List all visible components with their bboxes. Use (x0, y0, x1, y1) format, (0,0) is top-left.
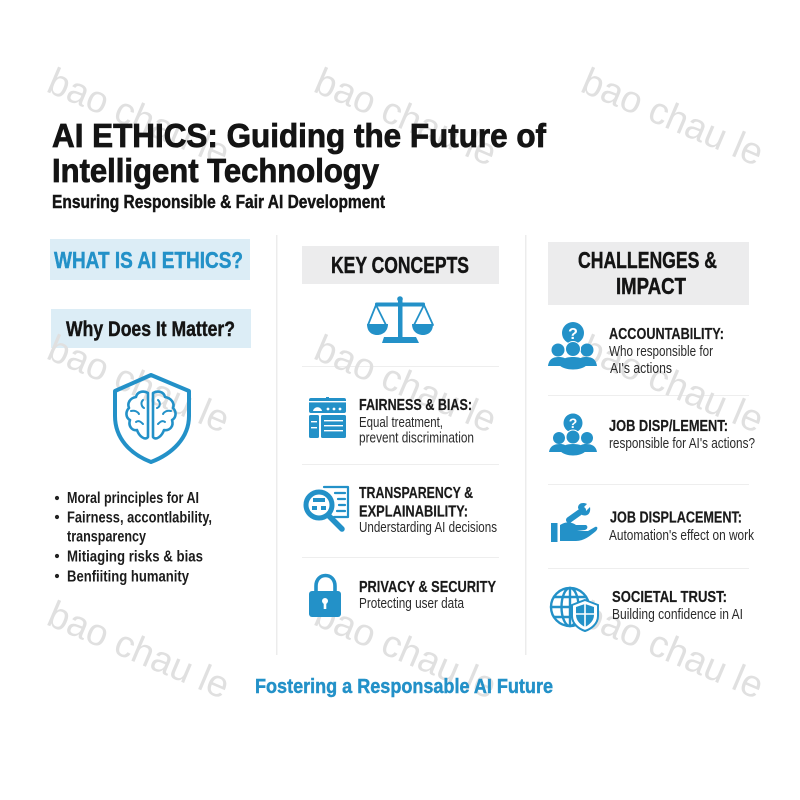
heading: why does it matter: Why Does It Matter? (66, 318, 235, 341)
panel: what is AI ethics (54, 247, 243, 586)
watermark pattern: bao chau le (308, 594, 503, 708)
item: transparency and explainability: Understarding AI decisions (359, 520, 497, 536)
icon: hand holding wrench (551, 503, 597, 542)
item: fairness and bias (309, 397, 474, 446)
icon: people with question mark: ? (568, 326, 578, 343)
watermark pattern: bao chau le (575, 328, 770, 442)
footer tagline: Fostering a Responsable AI Future (255, 676, 553, 698)
item: transparency and explainability: EXPLAINABILITY: (359, 504, 468, 520)
watermark pattern: bao chau le (41, 328, 236, 442)
watermark pattern: bao chau le (575, 594, 770, 708)
title (52, 118, 547, 190)
title: AI ETHICS: Guiding the Future of (52, 118, 547, 155)
heading: challenges and impact (578, 247, 717, 299)
watermark pattern: bao chau le (41, 594, 236, 708)
item: societal trust: SOCIETAL TRUST: (612, 589, 727, 606)
heading: challenges and impact: CHALLENGES & (578, 247, 717, 273)
icon: people with question mark (548, 322, 597, 370)
item: societal trust: Building confidence in AI (612, 607, 743, 623)
item: privacy and security: Protecting user data (359, 596, 465, 612)
title: Intelligent Technology (52, 153, 379, 190)
panel: key concepts (306, 252, 497, 617)
icon: globe with shield (551, 588, 598, 631)
item: job displacement question: JOB DISP/LEMENT: (609, 418, 728, 435)
heading box: challenges and impact (548, 242, 749, 305)
icon: padlock (309, 576, 341, 617)
subtitle: Ensuring Responsible & Fair AI Development (52, 192, 385, 212)
icon: people with question mark (549, 414, 597, 456)
watermark pattern (41, 61, 770, 708)
item: accountability (548, 322, 724, 377)
icon: people with question mark: ? (569, 415, 577, 431)
heading: what is AI ethics: WHAT IS AI ETHICS? (54, 247, 243, 273)
item: accountability: Who responsible for (609, 344, 713, 360)
item: transparency and explainability: TRANSPARENCY & (359, 485, 473, 502)
icon: shield with brain (115, 375, 189, 462)
item: societal trust (551, 588, 743, 631)
icon: balance scales (367, 296, 433, 343)
heading box: what is AI ethics (50, 239, 250, 280)
icon: magnifier over document (306, 487, 348, 529)
heading: challenges and impact: IMPACT (616, 273, 686, 299)
item: job displacement: Automation's effect on work (609, 528, 755, 544)
bullet list: moral principles (55, 490, 212, 586)
watermark pattern: bao chau le (575, 61, 770, 175)
item: fairness and bias: Equal treatment, (359, 415, 443, 431)
item: fairness and bias: FAIRNESS & BIAS: (359, 397, 472, 414)
item: accountability: AI's actions (610, 361, 672, 377)
bullet list: moral principles: Fairness, accontlability, (67, 510, 212, 526)
watermark pattern: bao chau le (308, 61, 503, 175)
heading box: why does it matter (51, 309, 251, 348)
item: job displacement question (549, 414, 755, 456)
bullet list: moral principles: Benfiiting humanity (67, 568, 189, 586)
item: job displacement (551, 503, 755, 544)
item: privacy and security: PRIVACY & SECURITY (359, 579, 496, 596)
item: privacy and security (309, 576, 496, 617)
item: accountability: ACCOUNTABILITY: (609, 326, 724, 343)
item: job displacement question: responsible for AI's actions? (609, 436, 755, 452)
panel: challenges and impact (548, 247, 755, 631)
watermark pattern: bao chau le (41, 61, 236, 175)
heading box: key concepts (302, 246, 499, 284)
bullet list: moral principles: Moral principles for AI (67, 490, 199, 507)
item: fairness and bias: prevent discrimination (359, 430, 474, 446)
item: job displacement: JOB DISPLACEMENT: (610, 510, 742, 526)
icon: dashboard (309, 397, 346, 438)
watermark pattern: bao chau le (308, 328, 503, 442)
heading: key concepts: KEY CONCEPTS (331, 252, 469, 278)
bullet list: moral principles: Mitiaging risks & bias (67, 548, 203, 566)
bullet list: moral principles: transparency (67, 528, 146, 546)
item: transparency and explainability (306, 485, 497, 536)
